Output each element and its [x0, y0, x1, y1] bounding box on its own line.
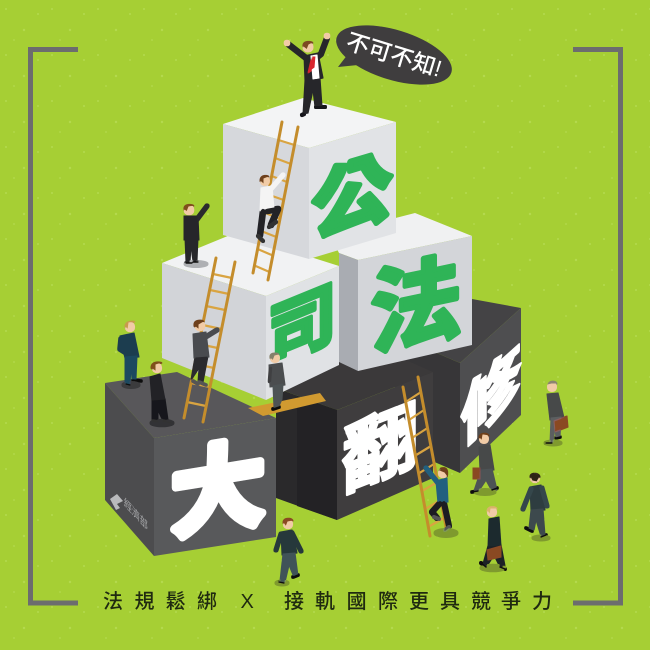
bubble text: 不可不知! [343, 28, 445, 82]
white cube: 法 [330, 213, 472, 371]
figure: black suit man [150, 362, 174, 427]
figure: walking man dark hair [523, 473, 550, 541]
figure: man with briefcase top right [544, 381, 568, 446]
figure: blue suit man [120, 321, 141, 388]
cube glyph: 法: 法 [370, 245, 462, 367]
figure: man pointing on cube [184, 204, 208, 268]
ladder: top cube [253, 122, 298, 280]
figure: walking man bottom [275, 518, 301, 586]
speech bubble [329, 14, 459, 96]
figure: climber white shirt [258, 175, 283, 241]
ladder: left cube [184, 258, 235, 422]
white cube: 司 [162, 233, 339, 400]
figure: climber blue jumper [426, 468, 458, 538]
logo: 經濟部 [110, 494, 148, 534]
cube glyph: 翻: 翻 [342, 392, 418, 506]
figure: blond man with briefcase [480, 507, 506, 572]
cube glyph: 大: 大 [171, 431, 265, 552]
ladder: right [403, 377, 446, 536]
cube glyph: 公: 公 [312, 143, 392, 252]
caption: 法規鬆綁X接軌國際更具競爭力 [103, 590, 552, 613]
figure: top man cheering [284, 33, 330, 115]
left bracket [30, 50, 78, 603]
figure: man on plank [269, 353, 285, 409]
right bracket [573, 50, 620, 603]
plank [248, 393, 326, 416]
logo: 經濟部: 經濟部 [124, 494, 148, 534]
dark cube: 修 [395, 299, 521, 473]
figure: climber grey suit [191, 320, 217, 385]
white cube: 公 [223, 98, 396, 259]
cube glyph: 司: 司 [267, 273, 337, 380]
cube glyph: 修: 修 [461, 332, 521, 461]
dark cube: 大 [105, 372, 276, 556]
dark cube: 翻 [276, 345, 433, 520]
figure: man with briefcase left [472, 433, 497, 496]
